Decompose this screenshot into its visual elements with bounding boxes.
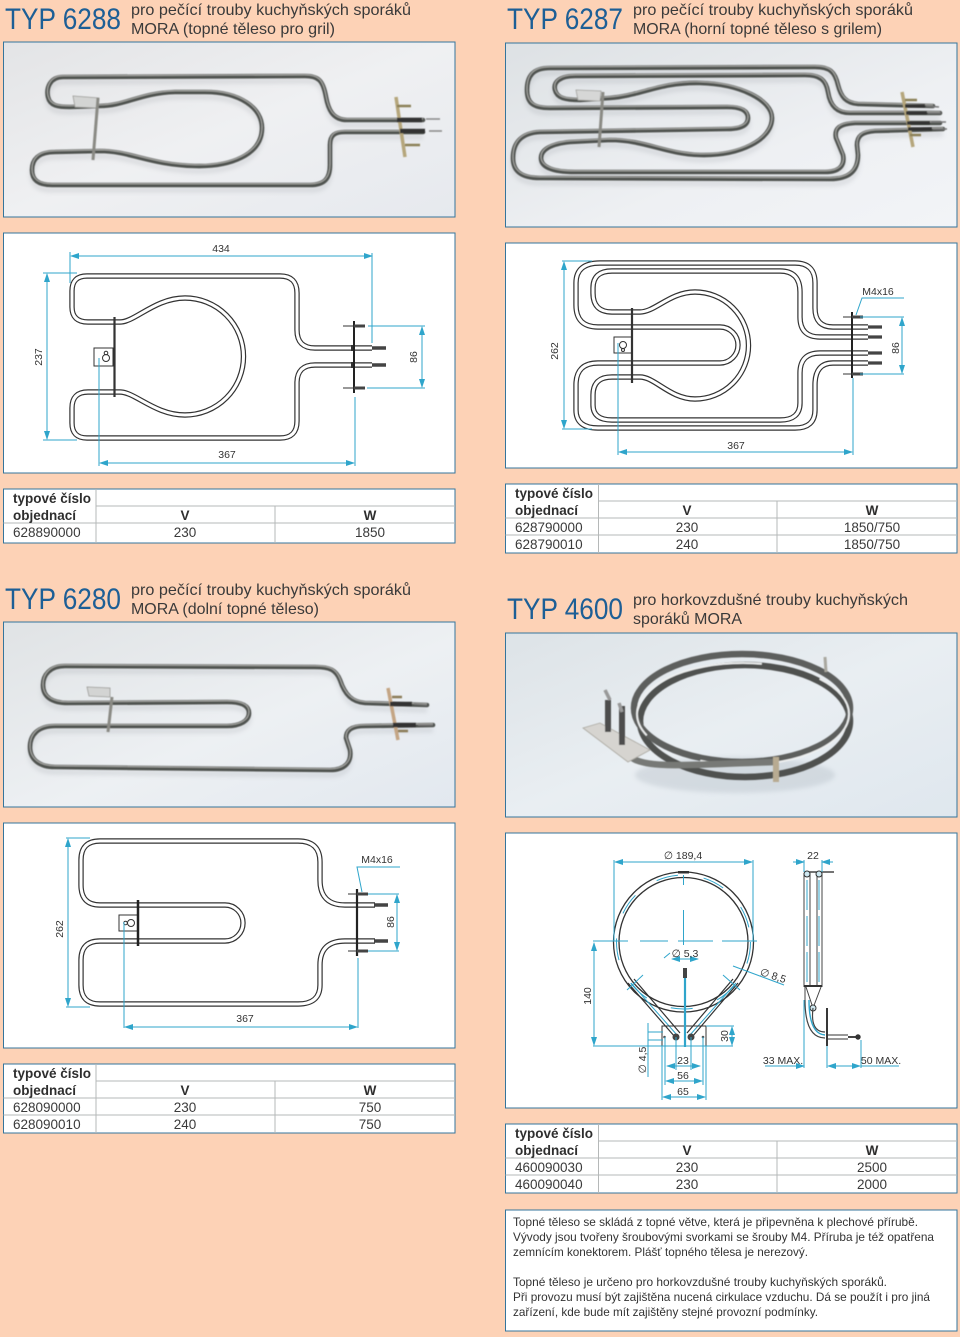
table: TYP 6280: 750: [359, 1100, 381, 1115]
dimension labels: 86: [408, 351, 420, 363]
photo panel: element 6280: [4, 622, 455, 807]
dimension labels: 30: [719, 1030, 731, 1042]
dimension labels: [549, 286, 902, 452]
table: TYP 6287: 1850/750: [844, 520, 900, 535]
heating element outline: [576, 263, 868, 428]
table: TYP 6280: 628090010: [13, 1117, 81, 1132]
dimension labels: 367: [218, 449, 236, 461]
notes text box: Topné těleso se skládá z topné větve, která je připevněna k plechové přírubě.: [513, 1215, 918, 1229]
heading: TYP 4600: [507, 592, 908, 628]
ring heating element front view: [614, 871, 754, 1037]
heading: TYP 6280: [5, 581, 411, 618]
table: TYP 6288: [4, 489, 455, 543]
table: TYP 4600: 460090030: [515, 1160, 583, 1175]
dimension labels: 367: [727, 440, 745, 452]
dimension labels: 50 MAX.: [861, 1055, 901, 1067]
centre bolt and thick cyan axis: [684, 968, 686, 1047]
mounting plate with terminals: [662, 1026, 706, 1046]
table: TYP 4600: typové číslo: [515, 1126, 593, 1141]
table: TYP 6288: W: [364, 508, 377, 523]
heading: TYP 6280: MORA (dolní topné těleso): [131, 601, 319, 618]
table: TYP 6280: W: [364, 1083, 377, 1098]
dimension lines: [66, 838, 400, 1028]
table: TYP 4600: objednací: [515, 1143, 579, 1158]
table: TYP 6287: V: [682, 503, 692, 518]
table: TYP 4600: 230: [676, 1177, 698, 1192]
drawing panel: element 6287 dimensions: [506, 243, 957, 468]
table: TYP 4600: 2000: [857, 1177, 887, 1192]
dimension labels: 262: [54, 920, 66, 938]
heading: TYP 4600: pro horkovzdušné trouby kuchyňských: [633, 592, 908, 609]
table: TYP 6280: [4, 1064, 455, 1133]
table: TYP 6280: typové číslo: [13, 1066, 91, 1081]
table: TYP 6280: V: [180, 1083, 190, 1098]
dimension labels: 33 MAX.: [763, 1055, 803, 1067]
table: TYP 6287: 628790000: [515, 520, 583, 535]
heading: TYP 6287: [507, 1, 913, 38]
heading: TYP 6287: TYP 6287: [507, 3, 623, 36]
table: TYP 6280: 750: [359, 1117, 381, 1132]
dimension labels: ∅ 5,3: [672, 948, 698, 960]
flange with terminals: [843, 312, 882, 378]
table: TYP 4600: W: [866, 1143, 879, 1158]
dimension labels: 367: [236, 1013, 254, 1025]
dimension labels: 22: [807, 850, 819, 862]
dimension labels: 262: [549, 342, 561, 360]
notes text box: Vývody jsou tvořeny šroubovými svorkami se šrouby M4. Příruba je též opatřena: [513, 1230, 934, 1244]
heading: TYP 6288: MORA (topné těleso pro gril): [131, 21, 335, 38]
table: TYP 4600: 2500: [857, 1160, 887, 1175]
table: TYP 6287: typové číslo: [515, 486, 593, 501]
photo panel: element 4600: [506, 633, 957, 817]
heading: TYP 6288: TYP 6288: [5, 3, 121, 36]
side view of ring element: [804, 871, 861, 1046]
mounting bracket with keyhole: [614, 308, 632, 383]
table: TYP 6288: typové číslo: [13, 491, 91, 506]
dimension labels: [33, 243, 420, 461]
dimension labels: M4x16: [862, 286, 894, 298]
table: TYP 6287: objednací: [515, 503, 579, 518]
drawing panel: element 6288 dimensions: [4, 233, 455, 473]
table: TYP 6287: [506, 484, 957, 553]
table: TYP 6280: 230: [174, 1100, 196, 1115]
notes text box: zemnícím konektorem. Plášť topného tělesa je nerezový.: [513, 1245, 808, 1259]
mounting bracket with keyhole: [119, 900, 138, 946]
photo panel: element 6287: [506, 43, 957, 227]
table: TYP 6287: W: [866, 503, 879, 518]
table: TYP 6280: 240: [174, 1117, 196, 1132]
dimension labels: 23: [677, 1055, 689, 1067]
notes text box: zařízení, kde bude mít zajištěny stejné provozní podmínky.: [513, 1305, 818, 1319]
heading: TYP 4600: TYP 4600: [507, 593, 623, 626]
heading: TYP 6287: pro pečící trouby kuchyňských sporáků: [633, 1, 913, 19]
side view dimension lines: [765, 860, 899, 1068]
heading: TYP 6287: MORA (horní topné těleso s grilem): [633, 21, 882, 38]
dimension labels: [582, 850, 901, 1098]
dimension labels: 65: [677, 1086, 689, 1098]
table: TYP 6287: 628790010: [515, 537, 583, 552]
flange with terminals: [348, 889, 388, 956]
heading: TYP 6280: pro pečící trouby kuchyňských sporáků: [131, 581, 411, 599]
dimension labels: 56: [677, 1070, 689, 1082]
mounting bracket with keyhole: [94, 317, 114, 397]
heading: TYP 4600: sporáků MORA: [633, 610, 742, 628]
table: TYP 6280: 628090000: [13, 1100, 81, 1115]
table: TYP 6288: V: [180, 508, 190, 523]
dimension lines: [562, 261, 904, 455]
table: TYP 6287: 1850/750: [844, 537, 900, 552]
table: TYP 6288: 1850: [355, 525, 385, 540]
table: TYP 6287: 230: [676, 520, 698, 535]
table: TYP 6288: 230: [174, 525, 196, 540]
dimension lines: [593, 860, 784, 1100]
photo panel: element 6288: [4, 42, 455, 217]
table: TYP 6287: 240: [676, 537, 698, 552]
dimension labels: 86: [385, 916, 397, 928]
heading: TYP 6288: [5, 1, 411, 38]
notes text box: [506, 1210, 957, 1331]
table: TYP 6280: objednací: [13, 1083, 77, 1098]
table: TYP 6288: objednací: [13, 508, 77, 523]
dimension labels: ∅ 189,4: [664, 850, 702, 862]
table: TYP 4600: 460090040: [515, 1177, 583, 1192]
dimension labels: M4x16: [361, 854, 393, 866]
dimension labels: [54, 854, 397, 1025]
dimension labels: ∅ 8,5: [758, 966, 788, 986]
drawing panel: element 6280 dimensions: [4, 823, 455, 1048]
table: TYP 4600: 230: [676, 1160, 698, 1175]
table: TYP 6288: 628890000: [13, 525, 81, 540]
dimension labels: ∅ 4,5: [637, 1047, 649, 1073]
flange with terminals: [343, 321, 386, 393]
table: TYP 4600: V: [682, 1143, 692, 1158]
heating element outline: [72, 276, 372, 438]
dimension labels: 434: [212, 243, 230, 255]
dimension lines: [43, 252, 425, 466]
heading: TYP 6280: TYP 6280: [5, 583, 121, 616]
dimension labels: 237: [33, 348, 45, 366]
table: TYP 4600: [506, 1124, 957, 1193]
drawing panel: element 4600 dimensions: [506, 833, 957, 1108]
notes text box: Topné těleso je určeno pro horkovzdušné trouby kuchyňských sporáků.: [513, 1275, 887, 1289]
dimension labels: 140: [582, 987, 594, 1005]
dimension labels: 86: [890, 342, 902, 354]
heating element outline: [81, 841, 375, 1004]
heading: TYP 6288: pro pečící trouby kuchyňských sporáků: [131, 1, 411, 19]
notes text box: Při provozu musí být zajištěna nucená cirkulace vzduchu. Dá se použít i pro jiná: [513, 1290, 930, 1304]
